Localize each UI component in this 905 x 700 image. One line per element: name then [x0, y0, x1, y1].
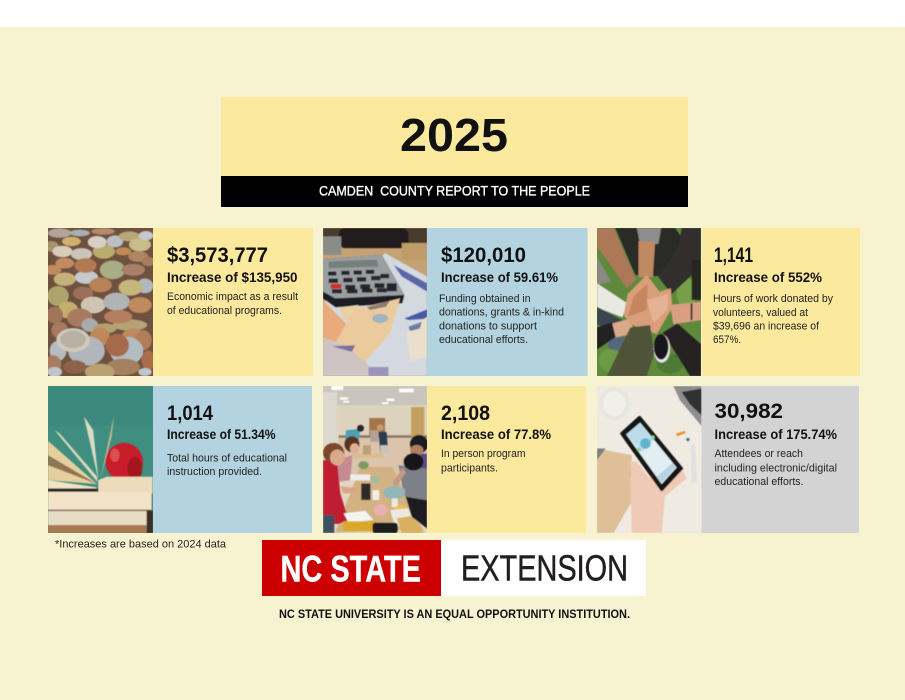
participants increase: Increase of 77.8% — [441, 426, 552, 442]
economic impact description: Economic impact as a result — [167, 291, 298, 303]
card: attendees and reach — [597, 386, 859, 533]
heading: year: 2025 — [400, 109, 508, 161]
participants description: participants. — [441, 462, 498, 474]
photo: smartphone in hand — [597, 386, 702, 533]
photo: calculator and banknotes — [323, 228, 427, 376]
volunteer hours amount: 1,141 — [714, 244, 753, 267]
instruction hours amount: 1,014 — [167, 402, 213, 425]
logo: NC State Extension — [262, 540, 646, 596]
participants amount: 2,108 — [441, 402, 490, 425]
subtitle: CAMDEN COUNTY REPORT TO THE PEOPLE — [319, 184, 590, 198]
top white band — [0, 0, 905, 27]
card: program participants — [323, 386, 586, 533]
reach description: Attendees or reach — [714, 448, 803, 460]
reach increase: Increase of 175.74% — [714, 426, 837, 442]
instruction hours increase: Increase of 51.34% — [167, 426, 276, 442]
black subtitle bar — [221, 176, 688, 207]
economic impact description: of educational programs. — [167, 305, 282, 317]
panel background — [702, 228, 860, 376]
photo: books and apple — [48, 386, 153, 533]
instruction hours description: Total hours of educational — [167, 452, 287, 464]
volunteer hours increase: Increase of 552% — [714, 269, 823, 285]
volunteer hours description: Hours of work donated by — [713, 293, 833, 305]
economic impact amount: $3,573,777 — [167, 244, 268, 267]
reach amount: 30,982 — [714, 400, 783, 423]
funding description: donations to support — [439, 320, 537, 332]
panel background — [153, 228, 313, 376]
reach description: educational efforts. — [714, 476, 804, 488]
card: economic impact — [44, 228, 313, 380]
card: funding obtained — [323, 228, 588, 376]
photo: participants in classroom — [323, 386, 427, 533]
volunteer hours description: $39,696 an increase of — [713, 320, 820, 332]
panel background — [701, 386, 859, 533]
photo: stacked hands — [597, 228, 701, 376]
equal opportunity statement: NC STATE UNIVERSITY IS AN EQUAL OPPORTUNITY INSTITUTION. — [279, 607, 630, 621]
logo wordmark NC STATE: NC STATE — [280, 548, 421, 590]
title banner — [221, 97, 688, 207]
economic impact increase: Increase of $135,950 — [167, 269, 298, 285]
photo: pile of coins — [48, 228, 153, 376]
participants description: In person program — [441, 448, 526, 460]
funding description: educational efforts. — [439, 334, 528, 346]
panel background — [153, 386, 312, 533]
card: instruction hours — [48, 386, 312, 533]
reach description: including electronic/digital — [714, 462, 837, 474]
funding amount: $120,010 — [441, 244, 526, 267]
panel background — [427, 228, 588, 376]
logo red block — [262, 540, 441, 596]
instruction hours description: instruction provided. — [167, 466, 262, 478]
volunteer hours description: 657%. — [713, 334, 741, 346]
logo wordmark EXTENSION: EXTENSION — [461, 548, 628, 588]
funding increase: Increase of 59.61% — [441, 269, 559, 285]
funding description: Funding obtained in — [439, 293, 530, 305]
funding description: donations, grants & in-kind — [439, 306, 564, 318]
card: volunteer hours — [597, 228, 860, 376]
volunteer hours description: volunteers, valued at — [713, 307, 808, 319]
footnote: *Increases are based on 2024 data — [55, 538, 227, 550]
logo white block — [441, 540, 646, 596]
panel background — [427, 386, 586, 533]
